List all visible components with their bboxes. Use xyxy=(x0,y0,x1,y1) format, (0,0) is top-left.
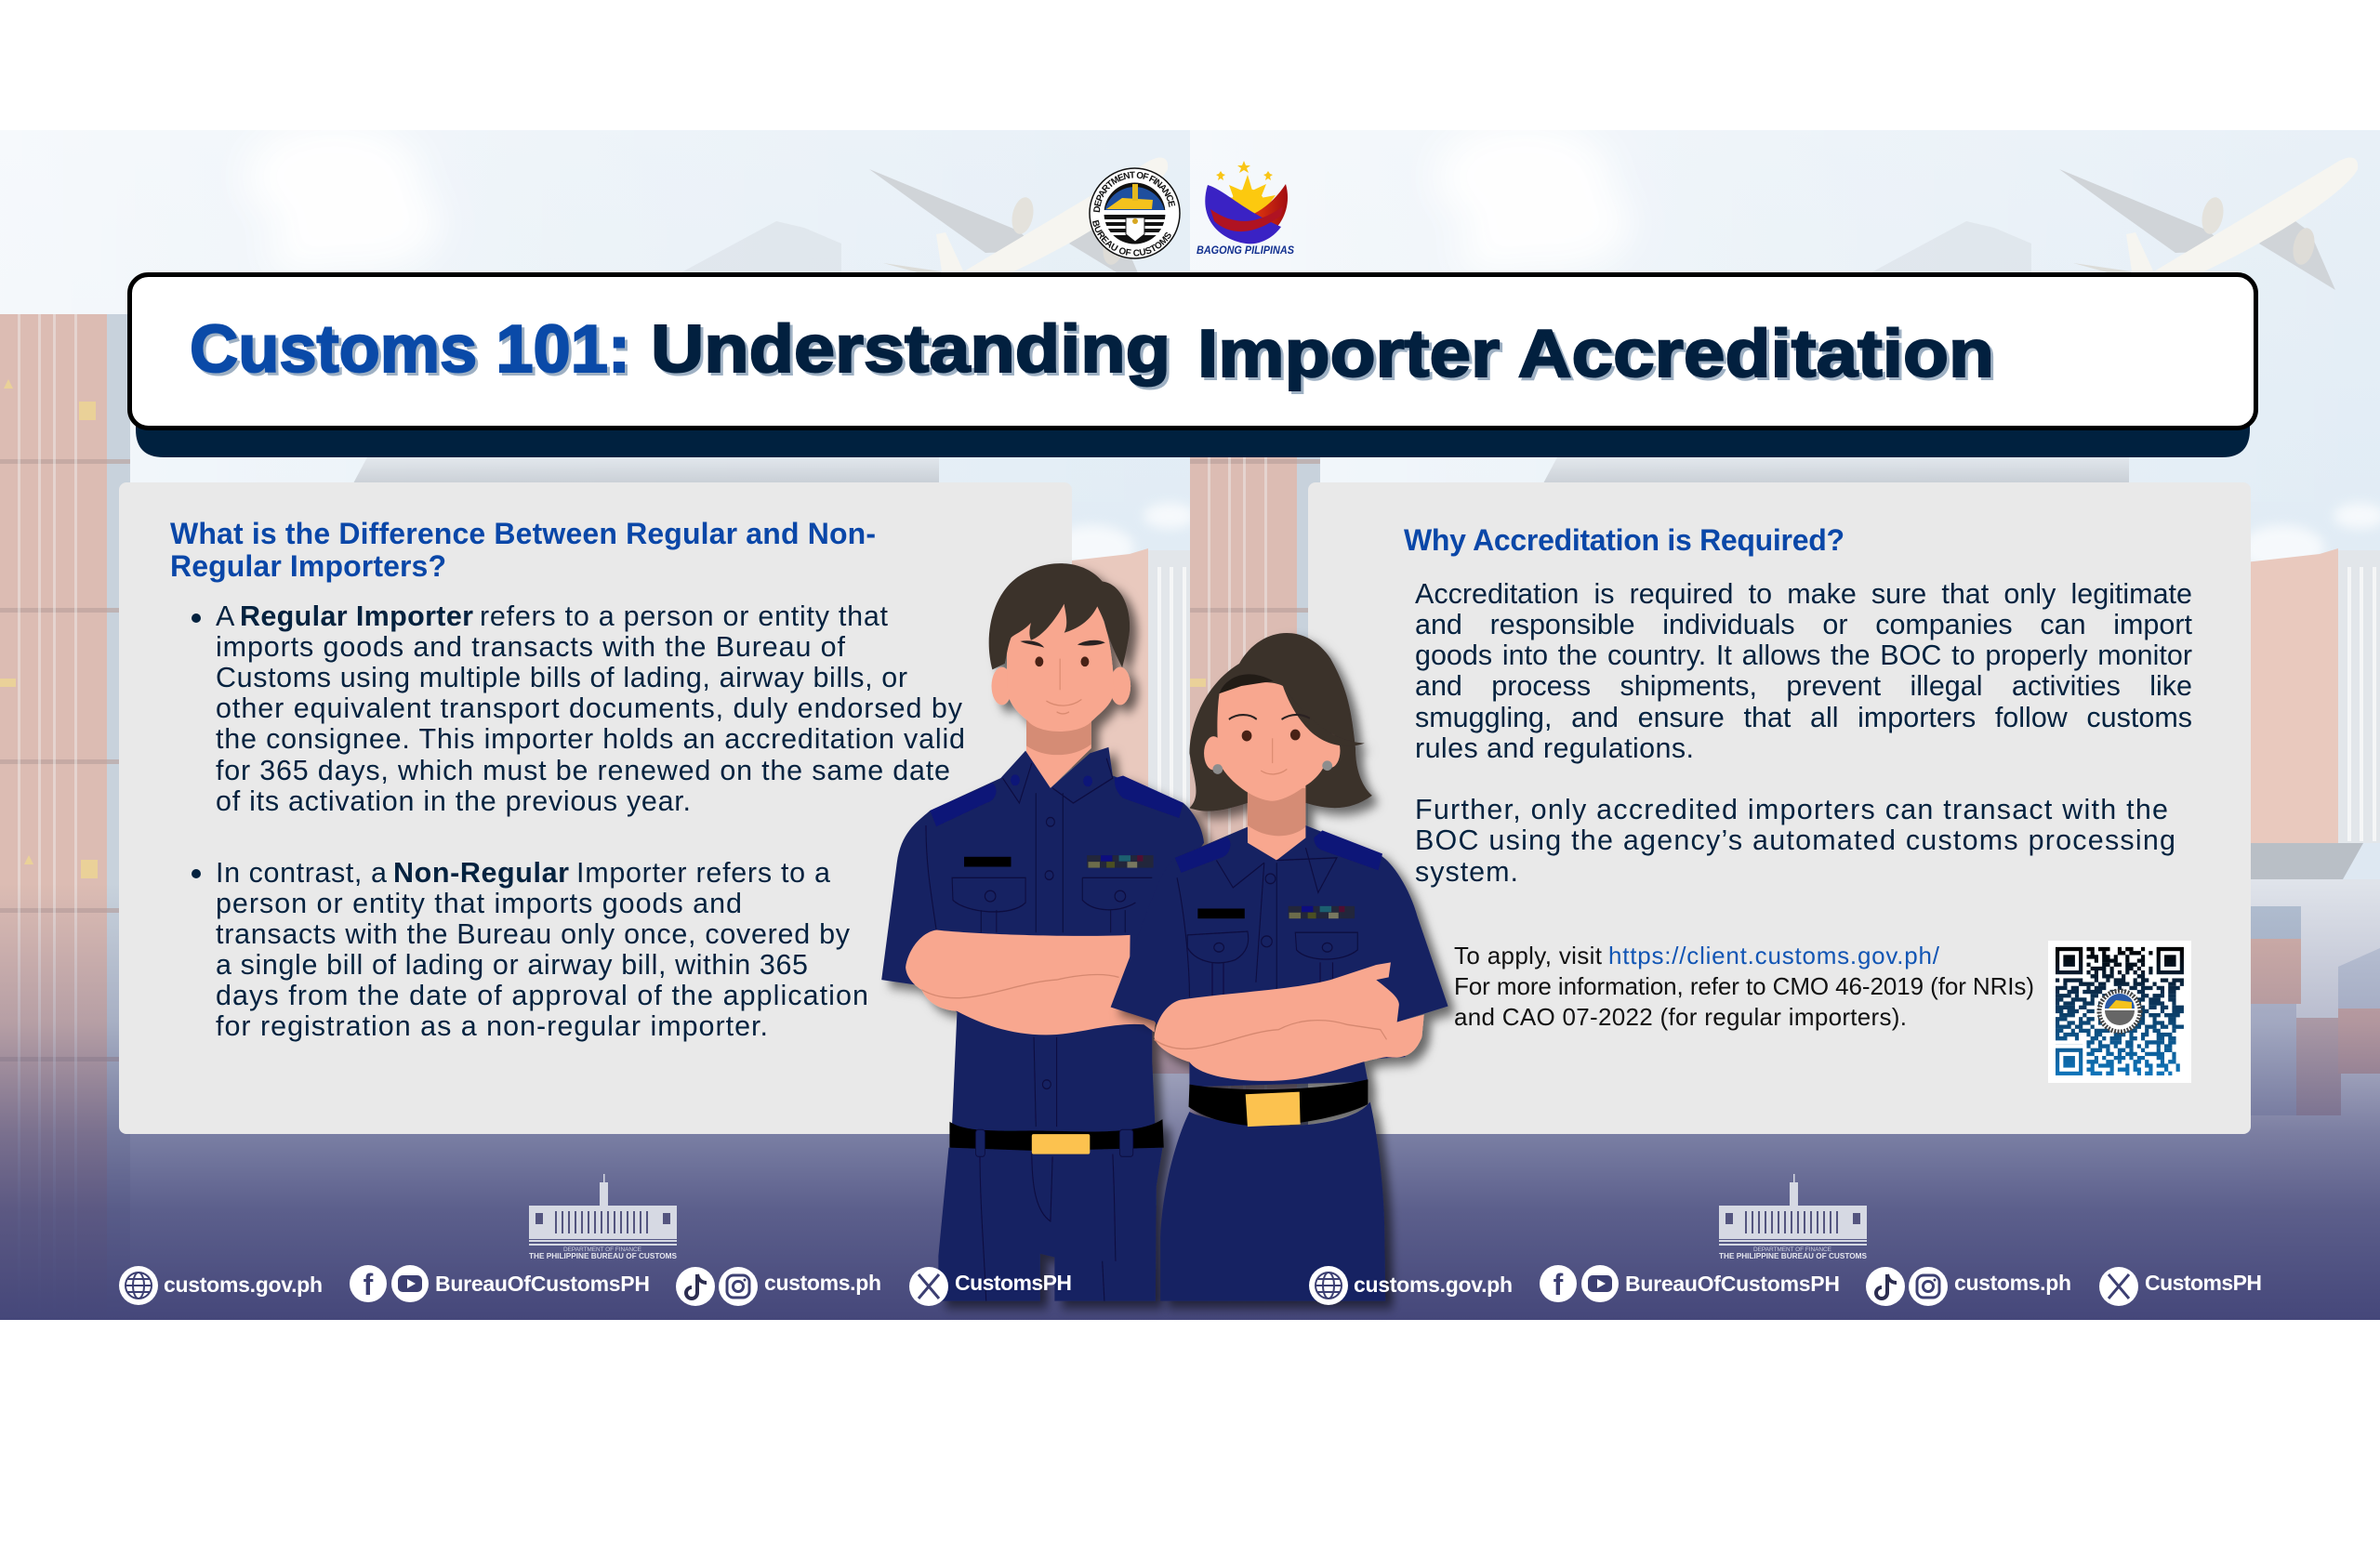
logo: Bagong Pilipinas: BAGONG PILIPINAS xyxy=(1197,245,1294,257)
text: accreditation justified paragraph: Accreditation is required to make sure that only legitimate xyxy=(1415,578,2192,610)
icon: instagram, right xyxy=(1909,1267,1948,1306)
bullet: non-regular importer: Non-Regular xyxy=(393,857,569,889)
icon: website globe xyxy=(119,1266,158,1305)
text: automated processing paragraph: system. xyxy=(1415,856,1518,888)
social media row: left: customs.ph xyxy=(764,1271,881,1295)
social media row: left xyxy=(119,1265,1072,1306)
icon: tiktok, right xyxy=(1866,1267,1905,1306)
bullet: non-regular importer: In contrast, a xyxy=(216,857,387,889)
background: right half photo collage xyxy=(1190,121,2380,1320)
social media row: right: BureauOfCustomsPH xyxy=(1625,1272,1840,1296)
icon: facebook: f xyxy=(364,1268,374,1301)
icon: youtube, right xyxy=(1581,1265,1619,1302)
QR centre seal xyxy=(2098,990,2141,1033)
icon: X, right xyxy=(2099,1267,2138,1306)
QR code xyxy=(2048,941,2191,1083)
bullet: non-regular importer: days from the date of approval of the application xyxy=(216,980,868,1011)
footer: left building logo: THE PHILIPPINE BUREAU OF CUSTOMS xyxy=(529,1252,678,1260)
icon: facebook, right: f xyxy=(1554,1268,1564,1301)
bullet: regular importer: refers to a person or entity that xyxy=(480,600,889,632)
bullet: regular importer: Customs using multiple bills of lading, airway bills, or xyxy=(216,662,907,693)
bullet: non-regular importer: transacts with the Bureau only once, covered by xyxy=(216,918,851,950)
text: accreditation justified paragraph: smuggling, and ensure that all importers follow customs xyxy=(1415,702,2192,733)
bullet: non-regular importer xyxy=(192,857,868,1042)
bullet: regular importer xyxy=(192,600,965,817)
title text: Understanding xyxy=(654,315,1173,389)
background: left half photo collage xyxy=(0,121,1196,1320)
social media row: left: BureauOfCustomsPH xyxy=(435,1272,650,1296)
footer: right building logo: DEPARTMENT OF FINANCE xyxy=(1753,1246,1832,1253)
icon: X xyxy=(909,1267,948,1306)
title text: Understanding xyxy=(651,312,1170,387)
icon: facebook xyxy=(350,1265,387,1302)
social media row: right xyxy=(1309,1265,2262,1306)
bullet: regular importer: imports goods and transacts with the Bureau of xyxy=(216,631,846,663)
footer: right building logo: THE PHILIPPINE BUREAU OF CUSTOMS xyxy=(1719,1252,1868,1260)
text: how to apply xyxy=(1454,942,2034,1031)
footer: right building logo xyxy=(1719,1174,1868,1260)
icon: facebook, right xyxy=(1540,1265,1577,1302)
heading: difference between importers xyxy=(170,517,876,583)
logo: Bureau of Customs seal: BUREAU OF CUSTOMS xyxy=(1091,219,1171,257)
title text: Customs 101: xyxy=(192,315,633,389)
text: how to apply: For more information, refer to CMO 46-2019 (for NRIs) xyxy=(1454,972,2034,1000)
bullet: regular importer: Regular Importer xyxy=(240,600,473,632)
heading: difference between importers: What is the Difference Between Regular and Non- xyxy=(170,517,876,550)
text: how to apply: To apply, visit xyxy=(1454,942,1603,969)
icon: tiktok xyxy=(676,1267,715,1306)
icon: instagram xyxy=(719,1267,758,1306)
bullet: regular importer: of its activation in the previous year. xyxy=(216,785,691,817)
heading: why accreditation: Why Accreditation is Required? xyxy=(1404,523,1844,557)
bullet: regular importer: for 365 days, which must be renewed on the same date xyxy=(216,755,950,786)
infographic artwork xyxy=(0,130,2380,1320)
text: how to apply: https://client.customs.gov.ph/ xyxy=(1608,942,1940,969)
title shadow bar xyxy=(136,409,2250,457)
text: accreditation closing line: rules and regulations. xyxy=(1415,732,1694,764)
panel: why accreditation is required xyxy=(1308,482,2251,1134)
text: accreditation justified paragraph: and responsible individuals or companies can import xyxy=(1415,609,2192,640)
text: automated processing paragraph xyxy=(1415,794,2175,888)
title text xyxy=(190,312,1997,394)
footer: left building logo: DEPARTMENT OF FINANCE xyxy=(563,1246,642,1253)
text: automated processing paragraph: BOC using the agency’s automated customs processing xyxy=(1415,824,2175,856)
bullet: non-regular importer: person or entity that imports goods and xyxy=(216,888,742,919)
bullet: regular importer: A xyxy=(216,600,235,632)
illustration: female customs officer xyxy=(1111,633,1448,1301)
social media row: left: customs.gov.ph xyxy=(164,1272,323,1297)
bullet: non-regular importer: a single bill of lading or airway bill, within 365 xyxy=(216,949,808,981)
text: accreditation justified paragraph xyxy=(1415,578,2192,733)
social media row: left: CustomsPH xyxy=(955,1271,1072,1295)
icon: youtube xyxy=(391,1265,429,1302)
man ears xyxy=(992,667,1130,705)
text: how to apply: and CAO 07-2022 (for regular importers). xyxy=(1454,1003,1907,1031)
title text: Customs 101: xyxy=(190,312,630,387)
illustration: male customs officer xyxy=(881,563,1204,1301)
panel: regular vs non-regular importers xyxy=(119,482,1072,1134)
social media row: right: customs.ph xyxy=(1954,1271,2071,1295)
social media row: right: CustomsPH xyxy=(2145,1271,2262,1295)
title text: Importer Accreditation xyxy=(1200,320,1997,394)
text: automated processing paragraph: Further, only accredited importers can transact with the xyxy=(1415,794,2168,825)
icon: website globe, right xyxy=(1309,1266,1348,1305)
text: accreditation justified paragraph: goods into the country. It allows the BOC to properly monitor xyxy=(1415,640,2192,671)
logo: Bureau of Customs seal: DEPARTMENT OF FINANCE xyxy=(1093,171,1175,212)
bullet: non-regular importer: for registration as a non-regular importer. xyxy=(216,1010,768,1042)
bullet: regular importer: other equivalent transport documents, duly endorsed by xyxy=(216,692,963,724)
social media row: right: customs.gov.ph xyxy=(1354,1272,1513,1297)
logo: Bagong Pilipinas xyxy=(1197,161,1294,257)
heading: difference between importers: Regular Importers? xyxy=(170,549,446,583)
bullet: regular importer: the consignee. This importer holds an accreditation valid xyxy=(216,723,965,755)
title text: Importer Accreditation xyxy=(1197,317,1994,391)
text: accreditation justified paragraph: and process shipments, prevent illegal activities like xyxy=(1415,670,2192,702)
footer: left building logo xyxy=(529,1174,678,1260)
logo: Bureau of Customs seal xyxy=(1089,167,1181,259)
bullet: non-regular importer: Importer refers to a xyxy=(576,857,830,889)
title box xyxy=(130,275,2255,428)
